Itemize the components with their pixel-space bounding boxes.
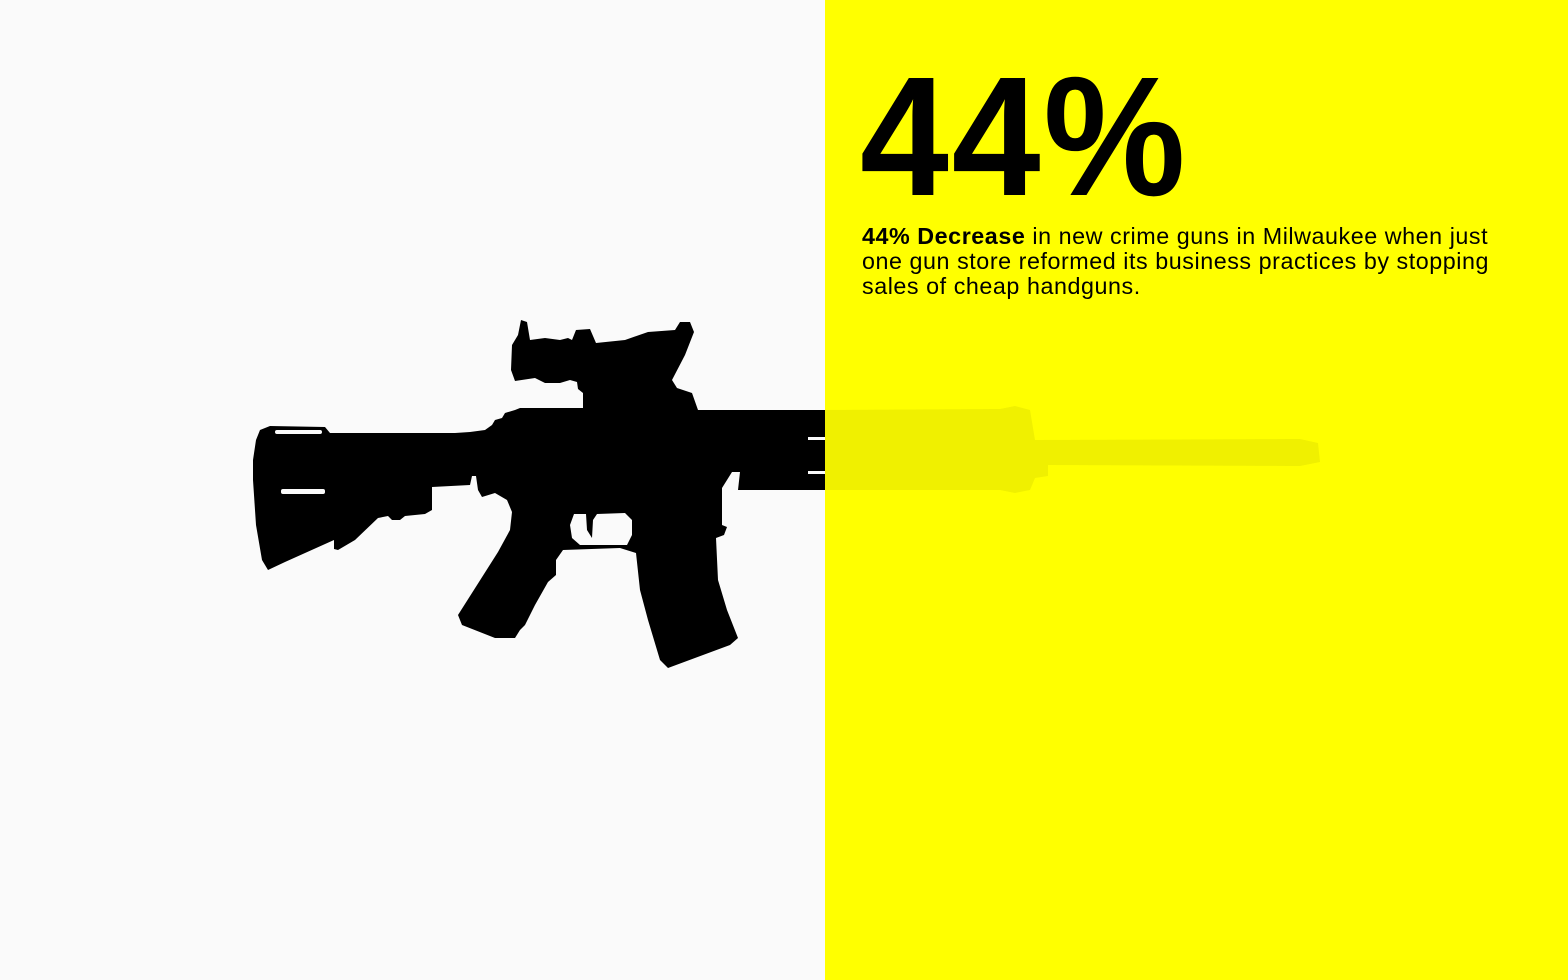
panel: yellow stat panel <box>825 0 1568 980</box>
text block: description: 44% Decrease in new crime guns in Milwaukee when just one gun store reformed its business practices by stopping sales of cheap handguns. <box>862 223 1489 299</box>
rifle body <box>253 320 825 668</box>
heading: 44%: 44% <box>860 42 1188 232</box>
barrel faded in yellow <box>825 406 1320 493</box>
